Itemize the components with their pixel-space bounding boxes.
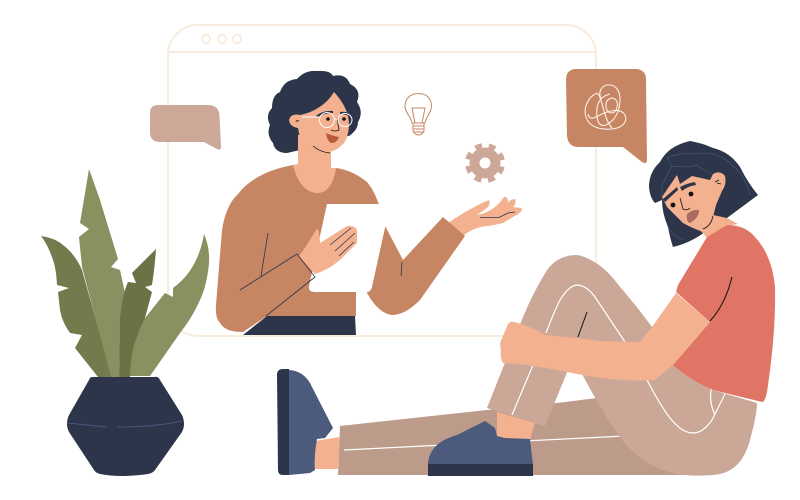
leaf: left dark xyxy=(41,236,112,377)
therapist open hand xyxy=(448,197,522,238)
therapist neck xyxy=(293,135,336,193)
shirt crease xyxy=(710,277,732,321)
panel: video call window frame xyxy=(168,25,596,336)
leaf: centre tall xyxy=(79,169,125,377)
leaf: middle dark xyxy=(119,249,156,377)
therapist eyebrows and features xyxy=(296,111,352,153)
arm hugging knee xyxy=(500,293,710,380)
therapist sweater xyxy=(216,165,379,332)
pot seam xyxy=(67,421,182,427)
back leg xyxy=(338,398,700,475)
pot xyxy=(67,377,184,476)
therapist face xyxy=(289,92,349,152)
speech bubble: left blank xyxy=(150,105,221,150)
white seam far leg xyxy=(344,436,625,450)
plant xyxy=(41,169,209,476)
icon: lightbulb xyxy=(405,94,432,135)
finger and sleeve lines xyxy=(240,228,402,316)
therapist hair xyxy=(268,71,361,153)
trouser crease xyxy=(578,312,587,337)
figure: sad woman xyxy=(277,141,775,476)
icon: scribble xyxy=(585,85,626,129)
near shoe xyxy=(428,421,533,476)
icon: gear xyxy=(464,142,506,184)
speech bubble: tangled thoughts xyxy=(566,69,647,163)
therapist hand on clipboard xyxy=(299,226,357,274)
therapist extended arm xyxy=(367,217,465,315)
far shoe xyxy=(277,369,333,475)
far foot xyxy=(315,437,340,469)
near foot xyxy=(497,412,535,440)
trouser seams xyxy=(512,285,727,433)
therapist navy trousers xyxy=(243,316,356,335)
leaf: right light xyxy=(130,234,209,376)
raised thigh and hip xyxy=(487,255,757,476)
shirt xyxy=(673,225,775,402)
facial features xyxy=(663,180,721,229)
therapist palm crease xyxy=(480,212,515,218)
hair xyxy=(649,141,758,247)
clipboard xyxy=(309,204,386,292)
hair strands xyxy=(662,153,750,240)
neck xyxy=(700,215,738,238)
face xyxy=(662,172,726,232)
figure: therapist xyxy=(216,71,522,335)
